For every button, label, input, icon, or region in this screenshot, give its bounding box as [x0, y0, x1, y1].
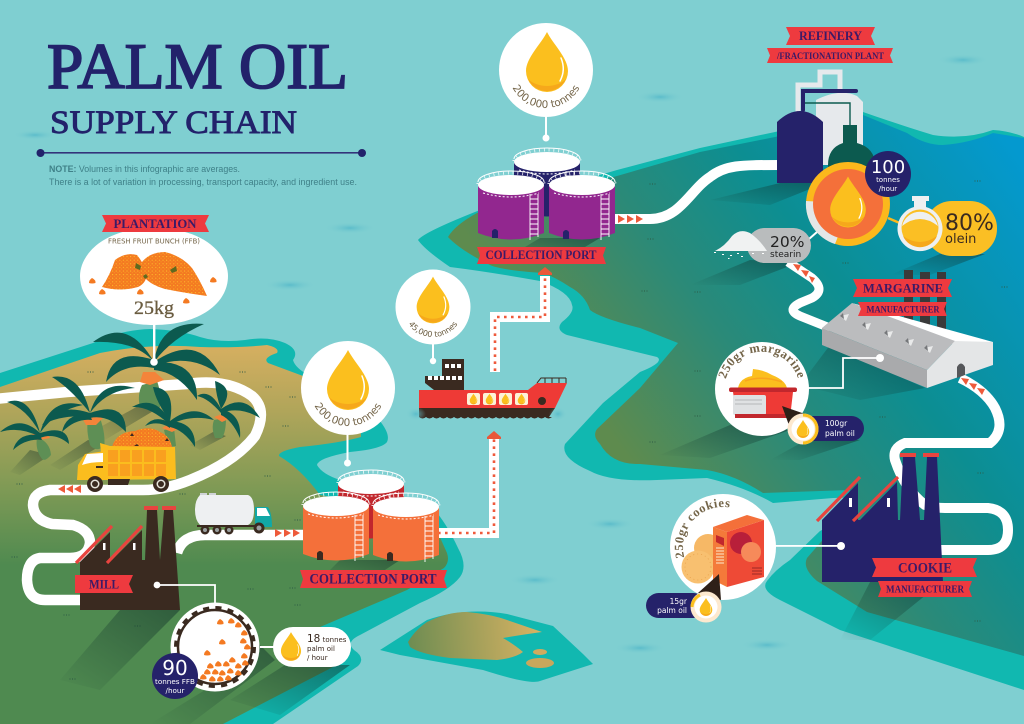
18 tonnes pill: 18 tonnes	[307, 633, 347, 645]
arrow: palm oil in cookies	[698, 574, 721, 600]
water ripples	[13, 54, 989, 654]
90 tonnes badge: 90	[162, 656, 188, 680]
cookie connector	[775, 542, 845, 550]
18 tonnes pill: palm oil	[307, 645, 335, 653]
15gr palm oil pill	[646, 592, 722, 622]
title divider	[36, 149, 366, 157]
note: NOTE: Volumes in this infographic are averages.	[49, 164, 240, 175]
right landmass: ground	[448, 115, 1024, 656]
100gr palm oil pill	[788, 414, 864, 444]
right landmass: shoreline	[418, 112, 1024, 690]
18 tonnes pill: / hour	[307, 654, 328, 662]
margarine tub	[729, 369, 797, 418]
island: small sandbanks	[526, 649, 554, 668]
road: plantation to mill	[0, 382, 261, 600]
shipping route: port to ship	[438, 431, 501, 533]
cookies	[682, 534, 722, 584]
stearin pill and pile: 20%	[770, 233, 804, 251]
palm 3: tallest	[93, 324, 220, 407]
truck with fruit	[77, 428, 176, 492]
bubble: 45,000 tonnes: 45,000 tonnes	[410, 322, 457, 337]
bubble: 45,000 tonnes	[396, 270, 470, 364]
road: mill to collection port	[177, 535, 305, 553]
banners: margarine	[853, 279, 952, 316]
banner: collection port purple: COLLECTION PORT	[486, 247, 597, 262]
15gr palm oil pill: 15gr	[670, 597, 688, 606]
100gr palm oil pill: palm oil	[825, 429, 855, 438]
subtitle: SUPPLY CHAIN	[50, 105, 297, 141]
banner: plantation	[102, 215, 209, 232]
stearin pill and pile: stearin	[770, 250, 801, 260]
banners: refinery: REFINERY	[799, 28, 863, 43]
90 tonnes badge: tonnes FFB	[155, 677, 195, 686]
left landmass: shoreline	[0, 329, 464, 724]
banner: plantation: PLANTATION	[114, 216, 197, 231]
ground tick marks	[12, 180, 1007, 680]
margarine circle	[715, 342, 809, 436]
bubble: 200,000 tonnes (lower)	[301, 341, 395, 466]
left landmass: ground	[0, 345, 448, 724]
island: sand	[408, 612, 542, 660]
100 tonnes badge: /hour	[879, 185, 897, 193]
ship	[406, 359, 567, 421]
weight: 25kg	[134, 298, 175, 319]
island: shoreline	[380, 612, 593, 682]
refinery plant	[777, 72, 875, 183]
banners: cookie: MANUFACTURER	[886, 584, 965, 596]
orange storage tanks	[303, 470, 439, 562]
refinery oil circle	[806, 162, 890, 246]
banners: refinery	[767, 27, 893, 63]
cookie box	[713, 515, 764, 587]
bubble: 200,000 tonnes (top): 200,000 tonnes	[512, 84, 579, 108]
note	[49, 164, 357, 188]
palm trees	[0, 324, 260, 460]
stearin pill and pile	[714, 228, 811, 263]
shipping route: ship to port	[495, 267, 552, 372]
road: port to refinery	[612, 165, 780, 219]
cookie factory	[817, 453, 943, 582]
100gr palm oil pill: 100gr	[825, 419, 848, 428]
margarine chimneys	[904, 270, 946, 332]
100 tonnes badge: tonnes	[876, 176, 900, 184]
15gr palm oil pill: palm oil	[657, 606, 687, 615]
note: There is a lot of variation in processing, transport capacity, and ingredient use.	[49, 177, 357, 188]
title: PALM OIL	[47, 31, 348, 103]
arrow: palm oil in margarine	[782, 406, 805, 428]
bubble: 200,000 tonnes (top)	[499, 23, 593, 142]
18 tonnes pill	[260, 627, 351, 667]
fresh fruit bunch label: FRESH FRUIT BUNCH (FFB)	[108, 236, 200, 246]
olein pill and flask: 80%	[945, 211, 994, 236]
palm 5	[197, 381, 260, 438]
mill gear circle	[170, 602, 260, 692]
purple storage tanks	[478, 148, 615, 240]
100 tonnes badge: 100	[871, 157, 905, 178]
cast shadows	[10, 183, 985, 724]
palm 2	[42, 376, 135, 449]
cookie circle	[670, 494, 776, 600]
palm 4	[132, 387, 214, 447]
road: stearin to margarine	[788, 262, 830, 328]
olein pill and flask: olein	[945, 232, 976, 247]
margarine connector	[805, 354, 884, 388]
90 tonnes badge	[152, 653, 198, 699]
mill connector	[154, 582, 215, 604]
bubble: 200,000 tonnes (lower): 200,000 tonnes	[314, 402, 381, 426]
olein pill and flask	[888, 196, 997, 256]
90 tonnes badge: /hour	[166, 686, 184, 695]
plantation bubble	[80, 228, 228, 325]
mill banner: MILL	[89, 576, 119, 592]
banners: margarine: MARGARINE	[863, 280, 943, 296]
margarine factory building	[822, 303, 993, 388]
mill factory	[76, 506, 180, 610]
banners: margarine: MANUFACTURER	[866, 304, 940, 314]
palm 1	[0, 401, 83, 460]
banner: collection port orange: COLLECTION PORT	[310, 572, 437, 588]
100 tonnes badge	[865, 151, 911, 197]
banners: cookie	[872, 558, 977, 597]
cookie circle: 250gr cookies	[674, 498, 730, 558]
plantation connector	[150, 322, 158, 366]
banners: refinery: /FRACTIONATION PLANT	[776, 51, 884, 61]
banners: cookie: COOKIE	[898, 560, 952, 576]
tanker truck	[195, 493, 272, 534]
road: margarine to cookie	[894, 378, 1008, 550]
margarine circle: 250gr margarine	[718, 346, 803, 379]
fruit bunches	[89, 252, 217, 304]
arrows: road direction	[58, 215, 985, 537]
mill banner	[75, 575, 133, 593]
